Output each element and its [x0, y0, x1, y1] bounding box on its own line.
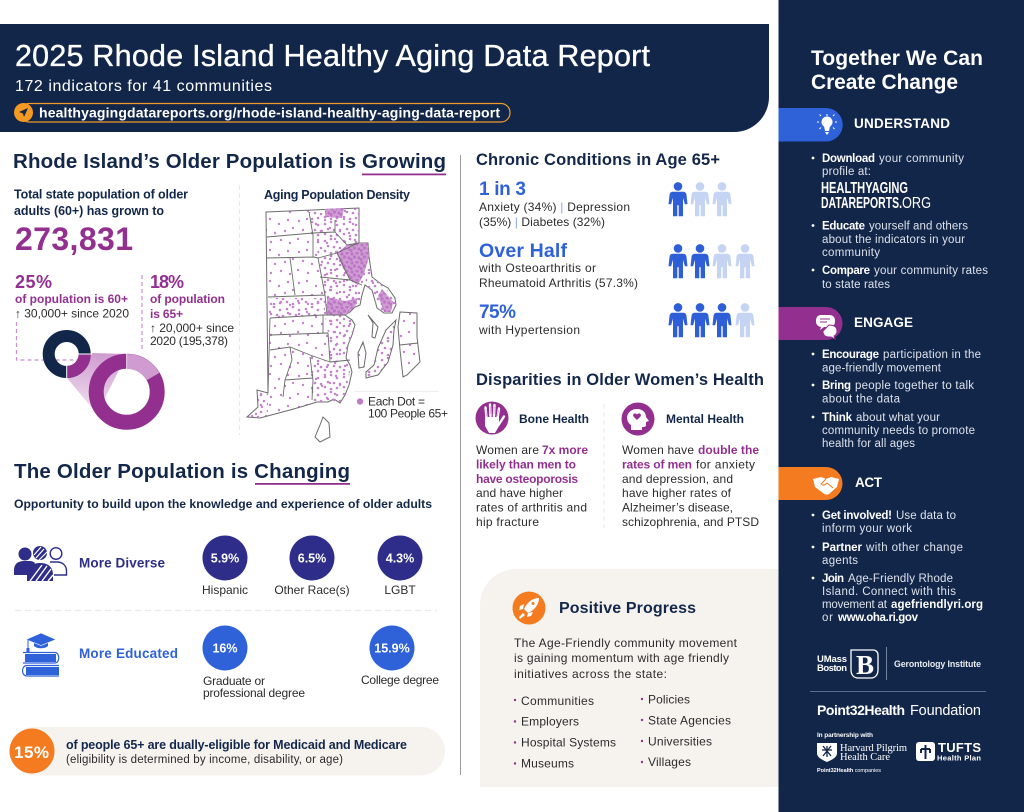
icon: hand [476, 402, 508, 434]
list: right column: Policies [648, 692, 690, 706]
stat: 75 percent: with Hypertension [478, 323, 580, 337]
stat: over half: Rheumatoid Arthritis (57.3%) [479, 276, 638, 290]
logo: point32health foundation [817, 702, 981, 719]
total population statistic: adults (60+) has grown to [14, 204, 164, 218]
subtitle: 172 indicators for 41 communities [15, 78, 272, 95]
list: act: agefriendlyri.org [891, 599, 983, 611]
logo: umass boston gerontology institute: Boston [817, 663, 847, 674]
panel: mental health: Women have [622, 443, 694, 457]
map heading: Aging Population Density [264, 188, 410, 202]
stat: 75 percent [478, 302, 580, 337]
callout: dual eligibility [10, 727, 445, 776]
panel: mental health: have higher rates of [622, 486, 732, 500]
list: right column [641, 692, 731, 769]
action: act: ACT [855, 475, 883, 490]
dense density areas [325, 208, 344, 218]
report title: 2025 Rhode Island Healthy Aging Data Report [15, 39, 651, 73]
pictogram: 1 of 3 [668, 182, 732, 216]
stat: lgbt [378, 536, 422, 597]
list: engage: community needs to promote [822, 425, 975, 437]
stat: college degree: 15.9% [374, 642, 410, 656]
stat: 1 in 3 [479, 179, 630, 229]
list: right column: Universities [648, 734, 712, 748]
panel: bone health: rates of arthritis and [476, 500, 587, 514]
panel: bone health: have osteoporosis [476, 472, 578, 486]
panel: bone health: and have higher [476, 486, 563, 500]
total population statistic: 273,831 [15, 221, 133, 257]
icon: rocket [512, 592, 546, 624]
logo: harvard pilgrim: Harvard Pilgrim [840, 743, 907, 754]
stat: other races: Other Race(s) [274, 583, 350, 597]
panel: positive progress [480, 569, 779, 787]
stat: 25 percent aged 60+ [15, 272, 129, 320]
panel: mental health [622, 402, 759, 529]
row: more educated: More Educated [79, 646, 178, 661]
list: act: Island. Connect with this [822, 586, 956, 598]
pictogram: 3 of 4 [668, 303, 754, 337]
list: act: agents [822, 555, 858, 567]
mainland and towns [247, 208, 396, 418]
icon: head with heart [622, 402, 654, 436]
panel: mental health: Alzheimer’s disease, [622, 500, 733, 514]
stat: 18 percent aged 65+: is 65+ [150, 307, 183, 321]
stat: 18 percent aged 65+: 2020 (195,378) [150, 334, 228, 348]
list: engage: people together to talk [855, 380, 974, 392]
list: engage: Bring [822, 380, 851, 392]
stat: 25 percent aged 60+: ↑ 30,000+ since 2020 [15, 306, 129, 320]
panel: positive progress: Positive Progress [559, 600, 696, 617]
logo: umass boston gerontology institute: B [856, 650, 874, 680]
logo: umass boston gerontology institute: UMass [817, 654, 847, 665]
large donut [96, 353, 159, 422]
list: act [812, 510, 983, 624]
stat: hispanic [202, 536, 248, 597]
panel: bone health: Bone Health [519, 412, 589, 426]
stat: 25 percent aged 60+: of population is 60+ [15, 292, 128, 306]
list: understand: your community [879, 153, 964, 165]
list: act: Age-Friendly Rhode [848, 573, 953, 585]
partner logos: In partnership with [817, 732, 873, 739]
list: act: Use data to [896, 510, 956, 522]
stat: hispanic: Hispanic [202, 583, 248, 597]
list: engage [812, 349, 981, 450]
logo: harvard pilgrim: Health Care [840, 752, 890, 763]
icon: handshake [813, 477, 839, 495]
logo: tufts health plan [916, 740, 981, 762]
list: engage: about the data [822, 394, 901, 406]
stat: hispanic: 5.9% [211, 552, 239, 566]
action: act [778, 467, 983, 624]
list: engage: Encourage [822, 349, 879, 361]
action: engage: ENGAGE [854, 315, 913, 330]
panel: bone health: likely than men to [476, 458, 576, 472]
panel: bone health: 7x more [542, 443, 588, 457]
list: left column [514, 694, 616, 770]
list: understand: ORG [902, 195, 931, 212]
list: act: www.oha.ri.gov [837, 612, 919, 624]
intro sentence: Opportunity to build upon the knowledge and experience of older adults [14, 497, 432, 511]
list: act: Join [822, 573, 844, 585]
list: engage: about what your [856, 412, 940, 424]
stat: graduate degree: 16% [212, 642, 238, 656]
small donut [49, 336, 92, 379]
eastern towns [398, 312, 420, 377]
list: engage: health for all ages [822, 438, 915, 450]
stat: college degree [361, 626, 439, 687]
logo: point32health foundation: Foundation [910, 703, 981, 719]
callout: dual eligibility: of people 65+ are dually-eligible for Medicaid and Medicare [66, 738, 407, 752]
logo: umass boston gerontology institute [817, 647, 981, 680]
list: understand: Download [822, 153, 875, 165]
list: understand: Compare [822, 265, 870, 277]
stat: graduate degree [202, 626, 305, 700]
list: engage: Think [822, 412, 853, 424]
row: more diverse: More Diverse [79, 556, 165, 570]
panel: mental health: and depression, and [622, 472, 733, 486]
section heading: older population changing: The Older Population is Changing [14, 460, 350, 483]
section heading: chronic conditions: Chronic Conditions in Age 65+ [476, 151, 720, 169]
action: understand [778, 108, 988, 291]
aquidneck island [366, 320, 396, 378]
donut charts [49, 336, 159, 422]
medium density areas [309, 208, 359, 258]
list: act: Partner [822, 542, 863, 554]
sidebar heading [811, 47, 983, 94]
map legend: Each Dot = [368, 394, 425, 408]
list: understand: DATAREPORTS. [821, 195, 902, 212]
pictogram: 2 of 4 [668, 244, 754, 278]
icon: light bulb [817, 114, 837, 134]
panel: mental health: for anxiety [696, 458, 755, 472]
list: engage: participation in the [883, 349, 981, 361]
stat: 18 percent aged 65+: of population [150, 292, 225, 306]
logo: tufts health plan: TUFTS [938, 740, 981, 755]
block island [315, 417, 330, 442]
section heading: disparities: Disparities in Older Women’s Health [476, 371, 764, 389]
list: understand: HEALTHYAGING [821, 180, 908, 197]
stat: 18 percent aged 65+: 18% [150, 272, 184, 292]
stat: 75 percent: 75% [479, 302, 516, 323]
icon: speech bubbles [816, 315, 837, 339]
stat: lgbt: 4.3% [386, 552, 414, 566]
map legend [355, 391, 448, 420]
stat: other races: 6.5% [298, 552, 326, 566]
map legend: 100 People 65+ [368, 406, 448, 420]
stat: 1 in 3: (35%) | Diabetes (32%) [479, 215, 605, 229]
sidebar [778, 0, 1024, 812]
icon: people [14, 546, 66, 581]
list: understand: profile at: [822, 166, 871, 178]
list: act: inform your work [822, 523, 912, 535]
map: aging population density [247, 208, 420, 442]
section heading: older population growing: Rhode Island’s Older Population is Growing [13, 150, 446, 173]
list: act: movement at [822, 599, 888, 611]
stat: over half: Over Half [479, 240, 568, 262]
panel: positive progress: initiatives across the state: [514, 667, 667, 681]
sidebar heading: Create Change [811, 71, 958, 94]
stat: 25 percent aged 60+: 25% [15, 272, 52, 292]
list: engage: age-friendly movement [822, 362, 942, 374]
stat: 1 in 3: 1 in 3 [479, 179, 526, 200]
logo: point32health foundation: Point32Health [817, 702, 905, 718]
conanicut and prudence islands [358, 315, 378, 368]
action: engage [778, 307, 981, 450]
list: act: with other change [865, 542, 963, 554]
list: right column: State Agencies [648, 714, 731, 728]
stat: 18 percent aged 65+: ↑ 20,000+ since [150, 321, 234, 335]
panel: mental health: rates of men [622, 458, 692, 472]
list: left column: Employers [521, 714, 579, 728]
stat: lgbt: LGBT [384, 583, 416, 597]
sidebar heading: Together We Can [811, 47, 983, 70]
panel: bone health: hip fracture [476, 515, 539, 529]
panel: positive progress: The Age-Friendly community movement [514, 636, 738, 650]
callout: dual eligibility: 15% [14, 743, 49, 762]
stat: graduate degree: Graduate or [203, 674, 265, 688]
row: more educated [22, 626, 439, 700]
list: left column: Museums [521, 756, 574, 770]
panel: mental health: schizophrenia, and PTSD [622, 515, 759, 529]
panel: bone health [476, 402, 589, 529]
row: more diverse [14, 536, 422, 597]
partner logos: Point32Health companies [817, 768, 881, 774]
stat: 18 percent aged 65+ [150, 272, 234, 348]
stat: graduate degree: professional degree [203, 686, 305, 700]
list: right column: Villages [648, 755, 691, 769]
stat: other races [274, 536, 350, 597]
list: understand: Educate [822, 220, 865, 232]
action: understand: UNDERSTAND [854, 116, 950, 131]
total population statistic [14, 188, 188, 257]
header banner [0, 24, 769, 132]
list: understand: to state rates [822, 279, 890, 291]
list: understand: your community rates [874, 265, 988, 277]
panel: mental health: Mental Health [666, 412, 744, 426]
list: left column: Hospital Systems [521, 736, 616, 750]
logo: umass boston gerontology institute: Gerontology Institute [894, 659, 981, 669]
list: left column: Communities [521, 694, 594, 708]
total population statistic: Total state population of older [14, 188, 188, 202]
panel: mental health: double the [698, 443, 759, 457]
stat: college degree: College degree [361, 673, 439, 687]
stat: 1 in 3: Anxiety (34%) | Depression [479, 200, 630, 214]
callout: dual eligibility: (eligibility is determined by income, disability, or age) [66, 754, 343, 766]
stat: over half: with Osteoarthritis or [478, 261, 596, 275]
list: understand: yourself and others [869, 220, 968, 232]
list: act: Get involved! [822, 510, 892, 522]
stat: over half [478, 240, 638, 290]
partner logos [817, 732, 981, 774]
logo: harvard pilgrim [817, 743, 907, 763]
list: understand [812, 153, 988, 291]
list: act: or [822, 612, 833, 624]
list: understand: about the indicators in your [822, 234, 965, 246]
list: understand: community [822, 247, 880, 259]
url pill: healthyagingdatareports.org/rhode-island-healthy-aging-data-report [39, 104, 500, 120]
icon: graduation cap and books [22, 633, 59, 676]
panel: bone health: Women are [476, 443, 539, 457]
logo: tufts health plan: Health Plan [937, 754, 981, 762]
panel: positive progress: is gaining momentum with age friendly [514, 651, 729, 665]
